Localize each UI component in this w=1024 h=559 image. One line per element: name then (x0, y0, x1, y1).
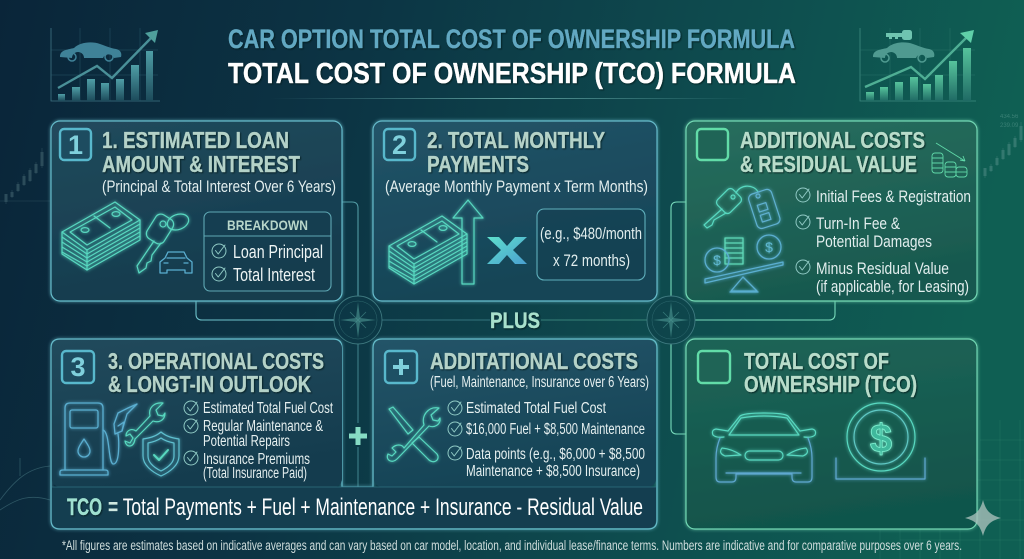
icon: car and key chart top right (860, 28, 976, 101)
title (228, 24, 796, 90)
checklist: (if applicable, for Leasing) (816, 277, 969, 296)
checklist: Estimated Total Fuel Cost (203, 400, 334, 417)
checklist: Estimated Total Fuel Cost (466, 400, 607, 417)
icon: shield (143, 432, 179, 476)
heading: ADDITATIONAL COSTS (430, 348, 638, 374)
icon: multiply sign (487, 237, 527, 264)
checklist: Regular Maintenance & (203, 418, 323, 435)
breakdown box: Loan Principal (233, 242, 323, 262)
heading (744, 348, 917, 397)
icon: keys with tag (704, 186, 781, 230)
subtitle: (Principal & Total Interest Over 6 Years) (102, 177, 336, 196)
heading: TOTAL COST OF (744, 348, 889, 374)
background grid lower right (880, 420, 1024, 559)
compass left (334, 296, 382, 344)
subtitle: (Fuel, Maintenance, Insurance over 6 Years) (430, 374, 649, 391)
badge 2: 2 (392, 130, 407, 160)
PLUS label: PLUS (490, 308, 540, 333)
checklist: Minus Residual Value (816, 259, 949, 278)
formula label: TCO (67, 494, 102, 521)
breakdown box: Total Interest (233, 265, 315, 285)
checklist: (Total Insurance Paid) (203, 465, 307, 482)
badge 1 (60, 129, 91, 160)
subtitle: (Average Monthly Payment x Term Months) (385, 177, 648, 196)
plus badge (385, 351, 417, 383)
checklist (796, 187, 971, 296)
heading: 1. ESTIMATED LOAN (102, 127, 289, 153)
empty badge (697, 129, 728, 160)
heading: & LONGT-IN OUTLOOK (108, 371, 311, 397)
heading: PAYMENTS (427, 151, 529, 177)
breakdown box: BREAKDOWN (227, 217, 308, 233)
title line 2: TOTAL COST OF OWNERSHIP (TCO) FORMULA (228, 58, 796, 90)
heading: ADDITIONAL COSTS (740, 127, 925, 153)
background candlesticks right and ticker (984, 114, 1022, 178)
icon: wrench (125, 403, 165, 446)
empty badge (698, 351, 730, 383)
panel: total cost of ownership (686, 339, 977, 529)
icon: fuel pump (60, 403, 137, 475)
heading (108, 348, 324, 397)
panel: step 1 loan amount (51, 121, 342, 301)
heading: 2. TOTAL MONTHLY (427, 127, 605, 153)
icon: car front (712, 413, 816, 482)
panel: additional costs and residual value (686, 121, 977, 301)
checklist: Turn-In Fee & (816, 214, 901, 233)
checklist: Insurance Premiums (203, 451, 310, 468)
background candlesticks right and ticker: 434.56 (1000, 114, 1019, 120)
plus sign between panels (349, 427, 367, 445)
background candlesticks left (0, 148, 50, 204)
title line 1: CAR OPTION TOTAL COST OF OWNERSHIP FORMULA (228, 24, 795, 54)
heading: 3. OPERATIONAL COSTS (108, 348, 324, 374)
panel: step 3 operational costs and formula (51, 339, 657, 529)
icon: up arrow (453, 200, 483, 284)
badge 3: 3 (70, 352, 86, 382)
checklist: Potential Damages (816, 232, 932, 251)
icon: car chart top left (51, 28, 160, 101)
badge 1: 1 (68, 130, 83, 160)
badge 3 (62, 351, 94, 383)
example box: x 72 months) (553, 251, 630, 270)
checklist: Initial Fees & Registration (816, 187, 971, 206)
heading (740, 127, 925, 177)
icon: balance with coins: $ (713, 252, 721, 268)
compass right (647, 296, 695, 344)
checklist: Data points (e.g., $6,000 + $8,500 (466, 446, 645, 463)
formula bar (52, 487, 656, 528)
icon: money stack (389, 216, 467, 284)
checklist (184, 400, 334, 482)
heading: & RESIDUAL VALUE (740, 151, 917, 177)
heading: AMOUNT & INTEREST (102, 151, 301, 177)
formula equation: = Total Payments + Fuel + Maintenance + Insurance - Residual Value (108, 494, 643, 521)
checklist: $16,000 Fuel + $8,500 Maintenance (466, 421, 645, 438)
icon: small car (160, 252, 192, 273)
breakdown box (204, 212, 331, 291)
checklist (448, 400, 645, 480)
icon: coins with falling arrow (932, 143, 967, 177)
heading (102, 127, 301, 177)
icon: balance with coins (705, 235, 783, 292)
icon: dollar coin in bracket: $ (870, 417, 892, 461)
icon: crossed tools (387, 407, 440, 462)
panel: step 2 monthly payments (373, 121, 657, 301)
background candlesticks right and ticker: 239.09 (1000, 123, 1019, 129)
background curves left (0, 458, 50, 510)
example box (537, 209, 645, 280)
connectors between panels (196, 202, 835, 487)
checklist: Potential Repairs (203, 433, 290, 450)
icon: key (137, 211, 191, 273)
panel: additational costs (374, 340, 656, 487)
badge 2 (384, 129, 415, 160)
heading: OWNERSHIP (TCO) (744, 371, 917, 397)
checklist: Maintenance + $8,500 Insurance) (466, 463, 640, 480)
icon: dollar coin in bracket (836, 403, 925, 479)
heading (427, 127, 605, 177)
sparkle mark (965, 500, 1001, 536)
example box: (e.g., $480/month (540, 224, 642, 243)
icon: balance with coins: $ (765, 239, 773, 255)
icon: money stack (62, 202, 140, 270)
